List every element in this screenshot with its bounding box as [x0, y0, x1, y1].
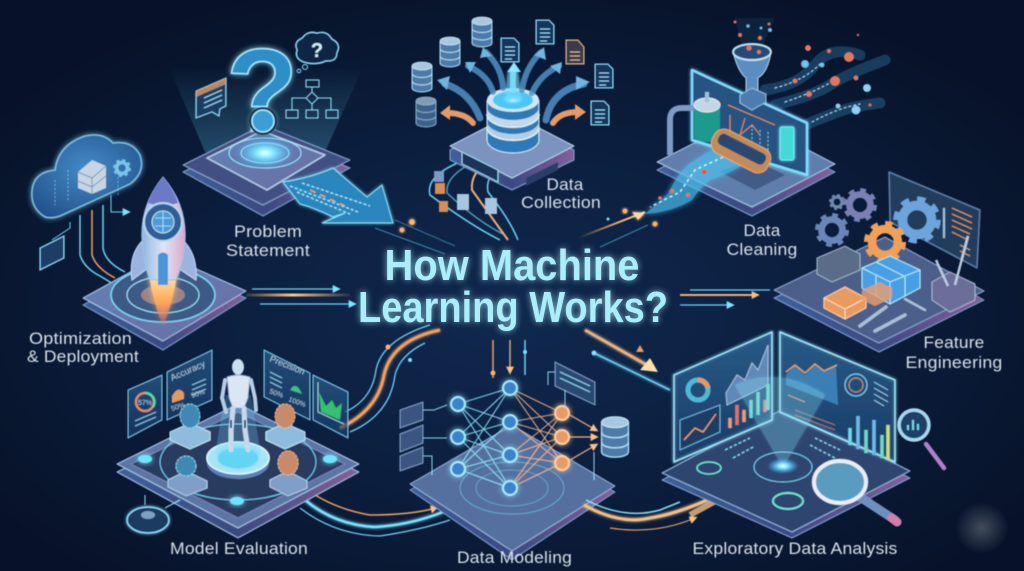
arrow: title to feature engineering [680, 290, 770, 305]
platform [183, 125, 350, 216]
funnel particles [734, 18, 775, 48]
icon: tools box [817, 236, 975, 312]
platform [410, 425, 615, 560]
arrow: cleaned stream [645, 144, 752, 214]
icons: gears [817, 190, 937, 260]
module: optimization and deployment [27, 135, 246, 366]
small documents [434, 171, 497, 214]
label: Optimization [29, 329, 132, 348]
hologram beam [735, 377, 825, 474]
icon: flowchart [286, 80, 338, 118]
trail: arrow to title [578, 208, 658, 247]
icon: question mark: ? [226, 25, 298, 157]
arrow: evaluation to modeling [300, 495, 450, 536]
label: Problem [234, 222, 302, 241]
label [906, 333, 1002, 372]
panel: accuracy: Accuracy [169, 358, 207, 383]
icon: thought cloud [296, 32, 339, 73]
arrow: deployment to title [246, 289, 354, 304]
panel: accuracy [167, 350, 212, 420]
icon: green filter [694, 92, 720, 142]
debris particles [792, 34, 872, 114]
module: exploratory data analysis [662, 332, 944, 558]
arrows: flows to and from title [246, 289, 770, 536]
label: & Deployment [27, 347, 139, 366]
icon: orange roller [707, 125, 775, 177]
trail: arrow to title [375, 219, 455, 254]
projection beam [168, 65, 364, 152]
panel: accuracy: 50% [170, 402, 186, 413]
panel: accuracy: 90% [190, 389, 206, 400]
icon: blue cubes [862, 256, 920, 304]
label: Model Evaluation [170, 539, 308, 558]
icon: small magnifier [899, 410, 944, 468]
title [358, 241, 668, 332]
icon: laptop [40, 236, 64, 270]
icon: output database [602, 417, 628, 457]
label [726, 221, 798, 259]
panels: input tables [400, 402, 447, 475]
panel: precision: 100% [287, 396, 307, 409]
back panel [889, 172, 980, 268]
icon: thought cloud: ? [311, 40, 323, 62]
output arrows [570, 415, 596, 460]
label: Exploratory Data Analysis [692, 539, 898, 558]
label [27, 329, 139, 366]
platform [450, 114, 574, 190]
panel: growth chart [313, 375, 348, 438]
back panel [692, 70, 807, 175]
icon: funnel [733, 44, 771, 110]
arrow: data ribbon [283, 168, 393, 223]
label: Feature [924, 333, 984, 352]
panel: right dashboard [780, 332, 895, 462]
watermark smudge [955, 502, 1009, 554]
label [226, 222, 310, 260]
icons: documents [501, 20, 613, 125]
panel: donut score [128, 375, 162, 438]
icon: chat panel [196, 78, 226, 118]
label: Collection [521, 193, 601, 212]
arrow: evaluation to title [340, 325, 440, 432]
platform [662, 408, 910, 538]
icon: pipe [670, 108, 696, 155]
debris streams [765, 52, 885, 125]
neural network nodes [451, 381, 569, 495]
arrow: title to analysis [585, 330, 670, 390]
label: Engineering [906, 353, 1002, 372]
panel: donut score: 57% [138, 400, 152, 407]
icon: teal screen [780, 127, 794, 160]
panel: precision: Precision [268, 354, 306, 377]
module: model evaluation [117, 350, 359, 558]
arrow: modeling to title [490, 340, 527, 378]
platform [657, 117, 835, 216]
icons: brains [168, 404, 307, 496]
rocket flame [149, 268, 177, 326]
label: Data Modeling [457, 548, 572, 567]
module: problem statement [168, 25, 455, 260]
module: data modeling [400, 362, 757, 567]
connector lines from cloud [52, 195, 128, 285]
panel: precision: 50% [268, 388, 284, 400]
icon: rocket [131, 177, 196, 285]
label [521, 175, 601, 212]
panel: doc top [548, 362, 595, 480]
neural network links [458, 388, 510, 488]
icon: orange cubes [824, 282, 892, 319]
module: data cleaning [578, 18, 885, 259]
title: How Machine [384, 241, 640, 290]
icons: databases [412, 17, 492, 127]
label: Data [744, 221, 781, 240]
arrow heads [437, 47, 590, 120]
label: Statement [226, 241, 310, 260]
flow lines to centre [429, 158, 518, 240]
label: Data [546, 175, 584, 194]
platform [117, 404, 359, 538]
icon: central database [487, 72, 539, 153]
arrow: modeling to analysis [584, 475, 757, 530]
label: Cleaning [726, 240, 798, 259]
platform [774, 237, 984, 352]
icon: wrenches [860, 299, 925, 331]
panel: left dashboard [674, 332, 772, 462]
icon: large magnifier [814, 461, 897, 522]
panel: precision [264, 350, 310, 420]
pedestal [207, 395, 269, 479]
icon: small disc [127, 495, 180, 533]
title: Learning Works? [358, 283, 668, 332]
icon: robot [222, 359, 256, 450]
platform [83, 254, 246, 350]
module: data collection [412, 17, 613, 240]
arrows radiating [445, 52, 584, 123]
icon: cloud [32, 135, 142, 218]
module: feature engineering [774, 172, 1002, 372]
